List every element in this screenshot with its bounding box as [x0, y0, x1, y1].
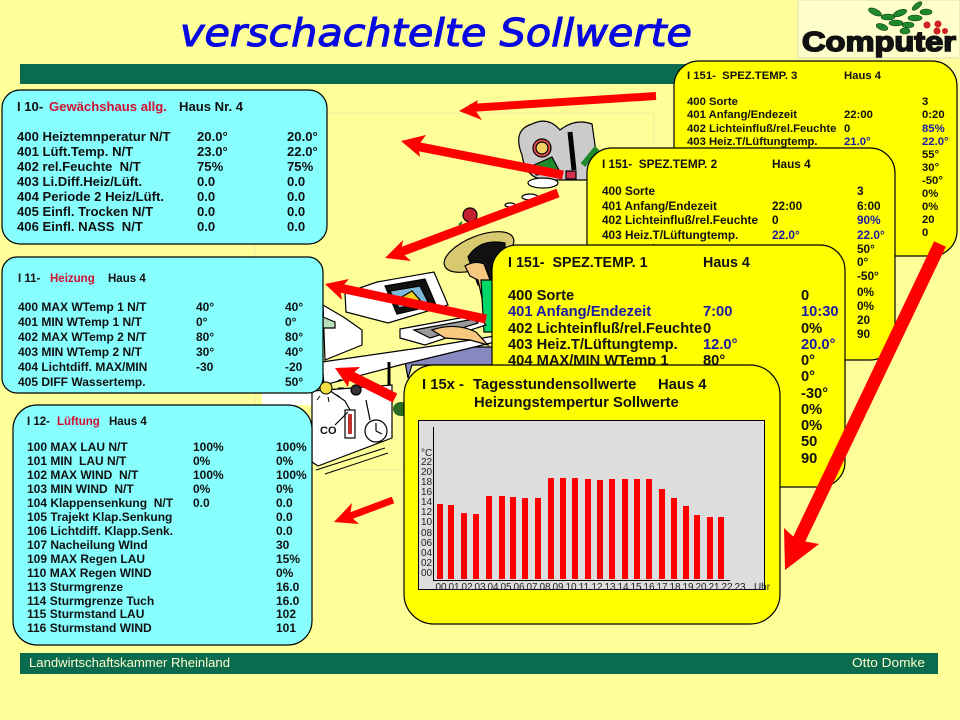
settings table: -50°: [857, 269, 879, 283]
settings table: 402 Lichteinfluß/rel.Feuchte: [508, 321, 702, 337]
x axis labels: 04: [487, 582, 499, 593]
settings table: 400 MAX WTemp 1 N/T: [18, 300, 146, 314]
illustration: grower at the computer: [262, 121, 600, 474]
settings table: 0%: [801, 321, 822, 337]
settings table: 107 Nacheilung WInd: [27, 538, 148, 552]
icon: computer and desk: [322, 272, 495, 395]
settings table: -30°: [801, 386, 828, 402]
settings table: [508, 288, 839, 467]
panel title: Gewächshaus allg.: [49, 99, 167, 114]
settings table: 113 Sturmgrenze: [27, 580, 123, 594]
settings table: 0%: [276, 482, 294, 496]
settings table: 20: [922, 214, 935, 226]
settings table: 22:00: [844, 109, 873, 121]
settings table: 0%: [857, 285, 875, 299]
panel title: Heizung: [50, 273, 95, 285]
icon: farmer with hat: [405, 223, 519, 378]
panel: I 151 SPEZ.TEMP. 2: [587, 148, 895, 360]
settings table: 404 Lichtdiff. MAX/MIN: [18, 360, 147, 374]
icon: plants in thought cloud: [459, 121, 600, 225]
settings table: 103 MIN WIND N/T: [27, 482, 134, 496]
settings table: 0%: [193, 454, 211, 468]
settings table: 100 MAX LAU N/T: [27, 440, 128, 454]
settings table: 22.0°: [922, 136, 949, 148]
panel title: Haus Nr. 4: [179, 99, 244, 114]
settings table: 30°: [196, 345, 214, 359]
x axis labels: [435, 582, 771, 593]
panel title: Haus 4: [109, 416, 147, 428]
x axis labels: 13: [604, 582, 616, 593]
settings table: 0%: [801, 402, 822, 418]
panel title: I 12-: [27, 416, 50, 428]
icon: small shrub: [393, 402, 409, 416]
settings table: 102: [276, 607, 296, 621]
settings table: 0°: [801, 353, 815, 369]
settings table: 12.0°: [703, 337, 738, 353]
y axis labels: [421, 448, 433, 579]
x axis labels: 20: [695, 582, 707, 593]
settings table: 0%: [922, 201, 938, 213]
settings table: 0: [801, 288, 809, 304]
settings table: 0.0: [276, 524, 293, 538]
settings table: 16.0: [276, 580, 300, 594]
settings table: 100%: [276, 440, 307, 454]
settings table: 80°: [703, 353, 725, 369]
x axis labels: 11: [579, 582, 590, 593]
settings table: 105 Trajekt Klap.Senkung: [27, 510, 172, 524]
settings table: 404 MAX/MIN WTemp 1: [508, 353, 669, 369]
panel title: I 151- SPEZ.TEMP. 3: [687, 70, 797, 82]
y axis labels: 14: [421, 497, 433, 508]
y axis labels: 16: [421, 487, 433, 498]
x axis labels: 09: [552, 582, 564, 593]
settings table: 20.0°: [197, 129, 228, 144]
y axis labels: 06: [421, 538, 433, 549]
settings table: -20: [285, 360, 303, 374]
settings table: 101: [276, 621, 296, 635]
settings table: 401 MIN WTemp 1 N/T: [18, 315, 142, 329]
settings table: 80°: [772, 242, 790, 256]
settings table: 405 DIFF Wassertemp.: [18, 375, 146, 389]
x axis labels: 06: [513, 582, 525, 593]
arrow: to I 11 panel from cloud: [385, 193, 558, 261]
settings table: 402 Lichteinfluß/rel.Feuchte: [602, 213, 758, 227]
panel title: I 151- SPEZ.TEMP. 2: [602, 157, 717, 171]
settings table: 0.0: [197, 189, 215, 204]
y axis labels: 08: [421, 528, 433, 539]
arrow: to sensor board: [335, 367, 395, 398]
x axis labels: 00: [435, 582, 447, 593]
settings table: 85%: [922, 123, 945, 135]
settings table: -30: [196, 360, 214, 374]
settings table: 20.0°: [287, 129, 318, 144]
panel title: Haus 4: [108, 273, 146, 285]
settings table: 0.0: [197, 174, 215, 189]
panel heading: Haus 4: [658, 377, 707, 393]
x axis labels: 14: [617, 582, 629, 593]
arrow: keyboard to I 11 panel: [325, 279, 486, 319]
x axis labels: 01: [448, 582, 460, 593]
settings table: 110 MAX Regen WIND: [27, 566, 152, 580]
y axis labels: 22: [421, 457, 433, 468]
settings table: 100%: [193, 468, 224, 482]
settings table: 0.0: [287, 189, 305, 204]
settings table: 403 Heiz.T/Lüftungtemp.: [602, 228, 738, 242]
settings table: 22.0°: [857, 228, 885, 242]
logo: Computer with plant: Computer: [802, 26, 956, 57]
settings table: 22.0°: [772, 228, 800, 242]
settings table: 116 Sturmstand WIND: [27, 621, 152, 635]
settings table: 6:00: [857, 199, 881, 213]
panel: I 15x Tagesstundensollwerte: [404, 365, 780, 624]
settings table: 404 MAX/MIN WTemp 1: [602, 242, 731, 256]
panel title: I 10-: [17, 99, 43, 114]
settings table: 0.0: [287, 219, 305, 234]
x axis labels: 19: [682, 582, 694, 593]
settings table: 0%: [193, 482, 211, 496]
settings table: 0%: [276, 454, 294, 468]
panel: I 151 SPEZ.TEMP. 3: [674, 61, 957, 256]
x axis labels: 17: [656, 582, 668, 593]
settings table: 50: [801, 434, 817, 450]
panel heading: Tagesstundensollwerte: [473, 377, 636, 393]
arrow: from I 151 panel 3 to the cloud: [459, 96, 656, 120]
panel title: Lüftung: [57, 416, 100, 428]
settings table: 22.0°: [287, 144, 318, 159]
x axis labels: 22: [721, 582, 733, 593]
settings table: 102 MAX WIND N/T: [27, 468, 138, 482]
settings table: 10:30: [801, 304, 839, 320]
x axis labels: Uhr: [754, 582, 771, 593]
settings table: 0.0: [276, 510, 293, 524]
footer text: organisation: Landwirtschaftskammer Rheinland: [29, 656, 230, 670]
settings table: 23.0°: [197, 144, 228, 159]
settings table: 90%: [857, 213, 881, 227]
settings table: [602, 184, 885, 341]
footer text: author: Otto Domke: [852, 656, 925, 670]
settings table: 0.0: [287, 174, 305, 189]
settings table: 100%: [276, 468, 307, 482]
top green bar: [20, 64, 700, 84]
settings table: 115 Sturmstand LAU: [27, 607, 144, 621]
settings table: [17, 129, 318, 234]
settings table: 402 Lichteinfluß/rel.Feuchte: [687, 123, 836, 135]
panel title: I 11-: [18, 273, 40, 285]
icon: sun on sensor board: [317, 379, 344, 402]
panel title: Haus 4: [703, 255, 750, 271]
y axis labels: 12: [421, 507, 433, 518]
settings table: 50°: [285, 375, 303, 389]
settings table: 400 Sorte: [687, 96, 738, 108]
x axis labels: 03: [474, 582, 486, 593]
x axis labels: 21: [708, 582, 720, 593]
settings table: 403 Heiz.T/Lüftungtemp.: [508, 337, 678, 353]
settings table: 400 Sorte: [602, 184, 655, 198]
settings table: 0.0: [197, 219, 215, 234]
y axis labels: 02: [421, 558, 433, 569]
y axis labels: 04: [421, 548, 433, 559]
panel: I 10 Gewächshaus allg.: [2, 90, 327, 244]
x axis labels: 05: [500, 582, 512, 593]
panel: I 12 Lüftung: [13, 405, 312, 645]
settings table: 30: [276, 538, 290, 552]
settings table: 101 MIN LAU N/T: [27, 454, 126, 468]
x axis labels: 16: [643, 582, 655, 593]
settings table: 40°: [285, 300, 303, 314]
settings table: 0°: [857, 255, 869, 269]
settings table: 104 Klappensenkung N/T: [27, 496, 173, 510]
x axis labels: 23: [734, 582, 746, 593]
settings table: 404 Periode 2 Heiz/Lüft.: [17, 189, 164, 204]
settings table: 0: [703, 321, 711, 337]
settings table: 22:00: [772, 199, 803, 213]
settings table: 0:20: [922, 109, 945, 121]
settings table: 400 Heiztemnperatur N/T: [17, 129, 171, 144]
settings table: 0.0: [287, 204, 305, 219]
settings table: 403 Heiz.T/Lüftungtemp.: [687, 136, 818, 148]
arrow: long diagonal to chart panel: [784, 244, 940, 570]
settings table: 50°: [857, 242, 875, 256]
settings table: -50°: [922, 175, 943, 187]
x axis labels: 12: [591, 582, 603, 593]
settings table: 0.0: [197, 204, 215, 219]
settings table: 114 Sturmgrenze Tuch: [27, 594, 154, 608]
settings table: 0.0: [193, 496, 210, 510]
settings table: 0: [844, 123, 850, 135]
settings table: 16.0: [276, 594, 300, 608]
settings table: 400 Sorte: [508, 288, 574, 304]
x axis labels: 08: [539, 582, 551, 593]
settings table: 7:00: [703, 304, 732, 320]
settings table: 3: [922, 96, 928, 108]
settings table: 406 Einfl. NASS N/T: [17, 219, 143, 234]
panel title: Haus 4: [844, 70, 882, 82]
settings table: 40°: [196, 300, 214, 314]
settings table: 401 Anfang/Endezeit: [687, 109, 797, 121]
x axis labels: 18: [669, 582, 681, 593]
settings table: 0%: [276, 566, 294, 580]
settings table: [687, 96, 949, 239]
panel title: Haus 4: [772, 157, 811, 171]
settings table: 80°: [196, 330, 214, 344]
arrow: to I 12 panel: [334, 500, 393, 524]
settings table: 401 Anfang/Endezeit: [508, 304, 651, 320]
settings table: 3: [857, 184, 864, 198]
arrow: to I 10 panel: [401, 135, 563, 175]
settings table: 109 MAX Regen LAU: [27, 552, 145, 566]
x axis labels: 07: [526, 582, 538, 593]
settings table: 0%: [857, 299, 875, 313]
panel: I 151 SPEZ.TEMP. 1: [492, 245, 845, 487]
settings table: 0.0: [276, 496, 293, 510]
icon: climate sensor board: CO: [320, 425, 337, 437]
settings table: 100%: [193, 440, 224, 454]
settings table: [18, 300, 303, 389]
settings table: 0°: [196, 315, 208, 329]
settings table: 90: [857, 327, 871, 341]
settings table: 401 Lüft.Temp. N/T: [17, 144, 133, 159]
panel: I 11 Heizung: [2, 257, 323, 393]
y axis labels: 00: [421, 568, 433, 579]
x axis labels: 10: [565, 582, 577, 593]
settings table: [27, 440, 307, 635]
settings table: 20: [857, 313, 871, 327]
settings table: 30°: [922, 162, 940, 174]
settings table: 402 rel.Feuchte N/T: [17, 159, 141, 174]
settings table: 0°: [285, 315, 297, 329]
settings table: 401 Anfang/Endezeit: [602, 199, 717, 213]
settings table: 90: [801, 451, 817, 467]
settings table: 106 Lichtdiff. Klapp.Senk.: [27, 524, 173, 538]
settings table: 0: [772, 213, 779, 227]
bar chart: hourly setpoints: [418, 420, 771, 593]
settings table: 403 Li.Diff.Heiz/Lüft.: [17, 174, 142, 189]
panel title: I 151- SPEZ.TEMP. 1: [508, 255, 648, 271]
settings table: 15%: [276, 552, 300, 566]
title: verschachtelte Sollwerte: [180, 11, 692, 55]
settings table: 403 MIN WTemp 2 N/T: [18, 345, 142, 359]
settings table: 21.0°: [844, 136, 871, 148]
icon: climate sensor board: [312, 385, 392, 474]
footer bar: [20, 653, 938, 674]
x axis labels: 02: [461, 582, 473, 593]
settings table: 75%: [197, 159, 224, 174]
y axis labels: °C: [421, 448, 432, 459]
y axis labels: 18: [421, 477, 433, 488]
y axis labels: 20: [421, 467, 433, 478]
settings table: 55°: [922, 149, 940, 161]
x axis labels: 15: [630, 582, 642, 593]
y axis labels: 10: [421, 517, 433, 528]
settings table: 40°: [285, 345, 303, 359]
icon: white desk remnant between panels: [262, 393, 312, 405]
settings table: 0%: [922, 188, 938, 200]
settings table: 0°: [801, 369, 815, 385]
logo: Computer with plant: [798, 0, 960, 58]
settings table: 75%: [287, 159, 314, 174]
panel heading: Heizungstempertur Sollwerte: [474, 395, 679, 411]
settings table: 80°: [285, 330, 303, 344]
panel heading: I 15x -: [422, 377, 464, 393]
settings table: 20.0°: [801, 337, 836, 353]
settings table: 402 MAX WTemp 2 N/T: [18, 330, 146, 344]
settings table: 405 Einfl. Trocken N/T: [17, 204, 153, 219]
settings table: 0%: [801, 418, 822, 434]
settings table: 0: [922, 227, 928, 239]
